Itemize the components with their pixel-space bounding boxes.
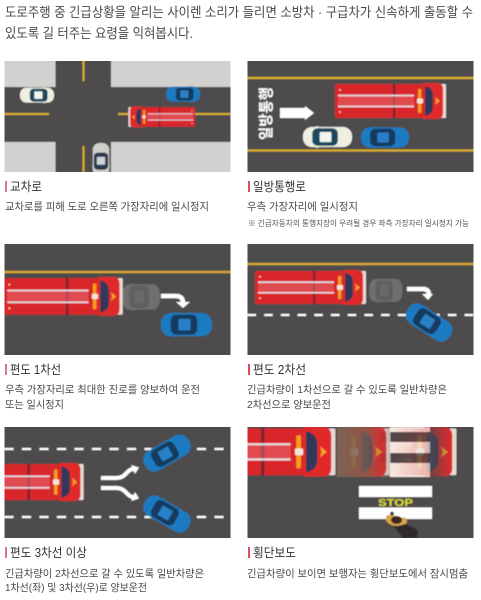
intro text	[5, 5, 473, 41]
heading: two lanes: 편도 2차선	[253, 363, 306, 377]
illustration: one-way road	[248, 61, 474, 172]
heading: one-way road: 일방통행로	[253, 179, 306, 194]
panel: crosswalk	[248, 427, 474, 578]
description: two lanes	[247, 383, 447, 411]
description: three or more lanes	[5, 567, 204, 594]
heading: three or more lanes: 편도 3차선 이상	[10, 546, 87, 560]
description: two lanes: 긴급차량이 1차선으로 갈 수 있도록 일반차량은	[247, 383, 447, 396]
description: three or more lanes: 긴급차량이 2차선으로 갈 수 있도록 일반차량은	[5, 567, 204, 580]
intro text: 있도록 길 터주는 요령을 익혀봅시다.	[5, 26, 193, 41]
description: one lane	[5, 383, 200, 411]
illustration: crosswalk	[248, 427, 474, 538]
description: crosswalk: 긴급차량이 보이면 보행자는 횡단보도에서 잠시멈춤	[247, 567, 468, 580]
panel: three or more lanes	[0, 423, 235, 594]
illustration: one lane	[4, 244, 230, 355]
illustration: two lanes	[248, 244, 474, 355]
panel: one lane	[0, 240, 235, 411]
heading: crosswalk: 횡단보도	[253, 546, 296, 560]
illustration: intersection	[4, 61, 230, 172]
description: one lane: 우측 가장자리로 최대한 진로를 양보하여 운전	[5, 383, 200, 396]
panel: one-way road	[243, 57, 478, 228]
description: one-way road: 우측 가장자리에 일시정지	[247, 200, 358, 213]
description: intersection: 교차로를 피해 도로 오른쪽 가장자리에 일시정지	[5, 200, 209, 213]
note: one-way road: ※ 긴급자동차의 통행지장이 우려될 경우 좌측 가장자리 일시정지 가능	[248, 218, 469, 228]
panel: two lanes	[243, 240, 478, 411]
illustration: one-way road: 일방통행	[258, 87, 275, 140]
heading: one lane: 편도 1차선	[10, 363, 61, 377]
illustration: crosswalk: STOP	[378, 497, 413, 509]
description: two lanes: 2차선으로 양보운전	[247, 399, 331, 411]
description: one lane: 또는 일시정지	[5, 398, 64, 411]
illustration: three or more lanes	[4, 427, 230, 538]
panel: intersection	[0, 57, 235, 213]
description: three or more lanes: 1차선(좌) 및 3차선(우)로 양보운전	[5, 582, 147, 594]
heading: intersection: 교차로	[10, 180, 42, 194]
